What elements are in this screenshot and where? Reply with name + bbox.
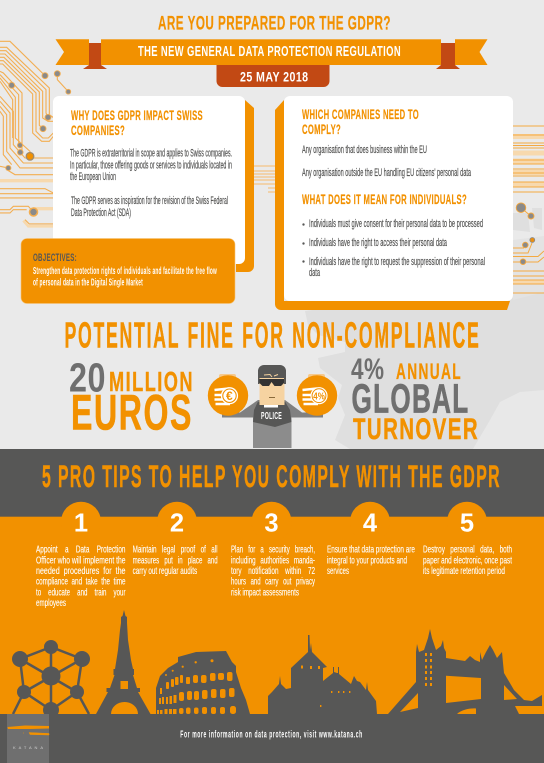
circuit nodes: left bbox=[6, 71, 71, 216]
circuit nodes: right bbox=[516, 203, 535, 265]
skyline: Atomium bbox=[12, 640, 90, 718]
tip 2: 2 bbox=[170, 510, 184, 538]
stat: 4% annual global turnover bbox=[351, 353, 479, 446]
date badge: 25 MAY 2018 bbox=[240, 68, 308, 84]
tip 3 bbox=[231, 510, 315, 598]
stat: 20 million euros: MILLION bbox=[109, 366, 194, 397]
panel: why does GDPR impact Swiss companies: The GDPR serves as inspiration for the revision of the Swiss Federal bbox=[71, 195, 228, 207]
footer text: For more information on data protection, visit www.katana.ch bbox=[180, 730, 363, 740]
tip 5: 5 bbox=[460, 510, 474, 538]
panel: why does GDPR impact Swiss companies bbox=[53, 96, 254, 272]
stat: 20 million euros: EUROS bbox=[71, 384, 193, 440]
panel: objectives: Strengthen data protection rights of individuals and facilitate the free flow bbox=[33, 266, 217, 277]
tip 4: 4 bbox=[363, 510, 378, 538]
panel: pro tips orange area bbox=[0, 502, 544, 715]
tip 1: 1 bbox=[74, 510, 88, 538]
text: which companies: Any organisation that does business within the EU bbox=[302, 144, 427, 156]
tip 4 bbox=[327, 510, 415, 577]
panel heading: why: WHY DOES GDPR IMPACT SWISS bbox=[71, 108, 203, 123]
panel heading: why bbox=[71, 108, 203, 138]
bullet list bbox=[302, 218, 485, 279]
circuit traces: right bbox=[513, 126, 544, 293]
tip 4: Ensure that data protection are bbox=[327, 545, 415, 556]
panel body text: why: Data Protection Act (SDA) bbox=[71, 207, 131, 219]
skyline: Castle bbox=[268, 635, 377, 714]
circuit traces: left bbox=[0, 41, 68, 226]
tip 3: tory notification within 72 bbox=[231, 566, 315, 577]
tip 1: to educate and train your bbox=[36, 587, 126, 598]
footer band bbox=[0, 714, 544, 763]
tip 1: needed procedures for the bbox=[36, 566, 126, 577]
illustration: police officer bbox=[208, 365, 337, 448]
tip 1: Officer who will implement the bbox=[36, 555, 126, 566]
officer body: POLICE bbox=[261, 411, 282, 422]
skyline: Eiffel Tower bbox=[96, 610, 150, 714]
tip 2 bbox=[133, 510, 218, 577]
stat: 4% annual global turnover: ANNUAL bbox=[396, 359, 462, 384]
panel: objectives: OBJECTIVES: bbox=[33, 252, 77, 264]
euro coin bag: € bbox=[226, 389, 233, 403]
percent coin bag: 4% bbox=[313, 390, 325, 402]
tip 1: compliance and take the time bbox=[36, 577, 126, 588]
ribbon banner bbox=[56, 39, 488, 69]
tip 3: risk impact assessments bbox=[231, 587, 299, 598]
stat: 20 million euros: 20 bbox=[69, 354, 106, 400]
panel: objectives: of personal data in the Digital Single Market bbox=[33, 278, 143, 288]
bullet list: data bbox=[309, 267, 320, 279]
tip 3: Plan for a security breach, bbox=[231, 545, 315, 556]
circuit traces: centre bbox=[254, 166, 275, 192]
logo: Katana: KATANA bbox=[13, 745, 43, 750]
panel heading: why: COMPANIES? bbox=[71, 123, 125, 138]
panel body text: why bbox=[70, 148, 232, 219]
tip 3: hours and carry out privacy bbox=[231, 577, 315, 588]
text: which companies bbox=[302, 144, 471, 179]
stat: 4% annual global turnover: 4% bbox=[351, 353, 384, 386]
heading: which companies bbox=[302, 107, 419, 137]
tip 1: Appoint a Data Protection bbox=[36, 545, 126, 556]
stat: 4% annual global turnover: TURNOVER bbox=[353, 413, 479, 446]
background map of Europe bbox=[305, 208, 544, 449]
tip 2: carry out regular audits bbox=[133, 566, 197, 577]
heading: which companies: WHICH COMPANIES NEED TO bbox=[302, 107, 419, 122]
skyline: Tower Bridge bbox=[388, 629, 542, 714]
panel: pro tips header band bbox=[0, 449, 544, 517]
tip 2: measures put in place and bbox=[133, 555, 218, 566]
panel body text: why: In particular, those offering goods or services to individuals located in bbox=[70, 160, 232, 172]
tip 3: including authorities manda- bbox=[231, 555, 315, 566]
panel: why does GDPR impact Swiss companies: The GDPR is extraterritorial in scope and applies to Swiss companies. bbox=[70, 148, 232, 160]
tip 4: services bbox=[327, 566, 349, 577]
tip 1: employees bbox=[36, 598, 66, 609]
skyline: Colosseum bbox=[156, 651, 250, 714]
heading: which companies: COMPLY? bbox=[302, 122, 341, 137]
tip 2: Maintain legal proof of all bbox=[133, 545, 218, 556]
panel: which companies and individuals bbox=[275, 96, 513, 310]
date badge bbox=[216, 65, 330, 87]
stat: 4% annual global turnover: GLOBAL bbox=[352, 375, 470, 421]
stat: 20 million euros bbox=[69, 354, 194, 440]
tip 4: integral to your products and bbox=[327, 555, 407, 566]
panel: objectives bbox=[21, 238, 235, 304]
tip 3: 3 bbox=[264, 510, 279, 538]
panel body text: why: the European Union bbox=[70, 171, 116, 183]
logo: Katana bbox=[7, 714, 49, 763]
title: ARE YOU PREPARED FOR THE GDPR? bbox=[158, 12, 391, 34]
tip 1 bbox=[36, 510, 126, 609]
ribbon heading: THE NEW GENERAL DATA PROTECTION REGULATION bbox=[138, 44, 401, 60]
tip 5 bbox=[423, 510, 512, 577]
